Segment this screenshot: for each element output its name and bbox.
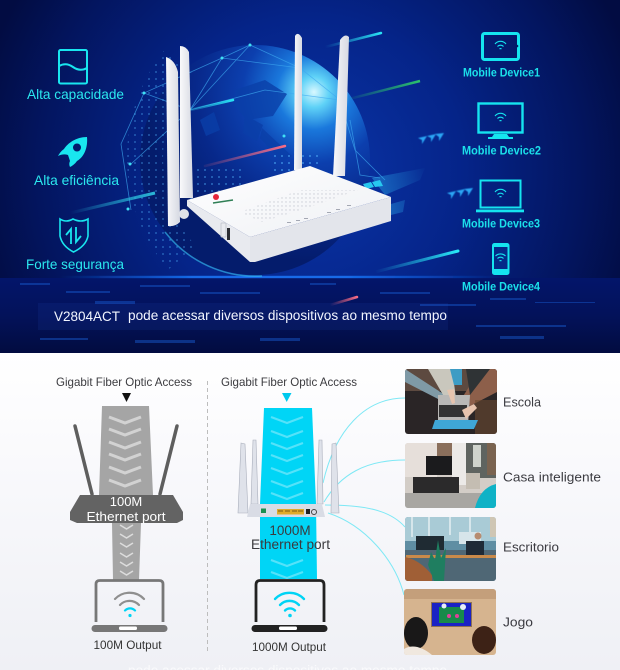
device: monitor	[462, 104, 541, 158]
device: laptop: Mobile Device3	[462, 216, 540, 230]
icon: shield with arrows	[60, 219, 88, 252]
chevrons lower	[120, 525, 133, 575]
label: Escola: Escola	[503, 394, 542, 410]
feature: Alta eficiencia: Alta eficiência	[34, 172, 119, 188]
feature: Alta capacidade	[27, 50, 124, 102]
scene: smart home photo	[405, 443, 496, 508]
caption band: V2804ACT	[54, 308, 120, 324]
router label: 100M	[110, 494, 142, 509]
antennas dark	[75, 426, 177, 494]
feature: Alta eficiencia	[34, 137, 119, 188]
light streaks	[70, 33, 458, 305]
device: tablet	[463, 34, 540, 80]
panel: 100M comparison	[56, 375, 192, 652]
label: Escritorio: Escritorio	[503, 540, 559, 554]
globe	[121, 44, 385, 276]
icon: capacity gauge	[59, 50, 87, 84]
panel: 100M comparison: Ethernet port	[86, 509, 166, 524]
feature: Forte seguranca	[26, 219, 124, 272]
device: phone	[462, 243, 540, 294]
grey data band	[99, 406, 153, 580]
router logo	[213, 194, 233, 203]
panel: 1000M comparison	[221, 375, 405, 654]
arrow: down cyan	[282, 393, 292, 402]
router silhouette	[70, 495, 183, 523]
panel: 1000M comparison: Ethernet port	[251, 537, 330, 552]
router label: 1000M	[269, 523, 311, 538]
label: Jogo: Jogo	[503, 614, 533, 630]
caption band: pode acessar diversos dispositivos ao mesmo tempo	[128, 308, 447, 323]
heading: right access: Gigabit Fiber Optic Access	[221, 375, 357, 389]
wifi links	[323, 398, 405, 595]
chevrons upper	[109, 417, 141, 486]
label: Casa inteligente: Casa inteligente	[503, 470, 601, 484]
caption band	[38, 303, 448, 330]
feature: Alta capacidade: Alta capacidade	[27, 86, 124, 102]
label: 100M output: 100M Output	[94, 638, 162, 652]
scene: school photo	[405, 369, 497, 434]
label: 1000M output: 1000M Output	[252, 640, 327, 654]
scene: gaming photo	[404, 589, 496, 655]
panel: comparison background	[0, 353, 620, 670]
device: phone: Mobile Device4	[462, 280, 540, 294]
heading: left access: Gigabit Fiber Optic Access	[56, 375, 192, 389]
arrow: down black	[122, 393, 131, 402]
router rear view	[238, 440, 339, 517]
divider	[206, 381, 208, 652]
icon: rocket	[58, 137, 87, 167]
scene: office photo	[405, 517, 496, 581]
panel: top hero background	[0, 0, 620, 353]
device: monitor: Mobile Device2	[462, 144, 541, 158]
chevrons	[271, 417, 303, 578]
device: laptop	[462, 180, 540, 230]
router photo: white gateway with four antennas	[166, 34, 391, 262]
icon: black laptop	[252, 580, 328, 632]
icon: grey laptop	[92, 580, 168, 632]
cyan data band	[260, 408, 317, 579]
device: tablet: Mobile Device1	[463, 66, 540, 80]
feature: Forte seguranca: Forte segurança	[26, 256, 124, 272]
arrows: signal chevrons	[418, 133, 473, 199]
